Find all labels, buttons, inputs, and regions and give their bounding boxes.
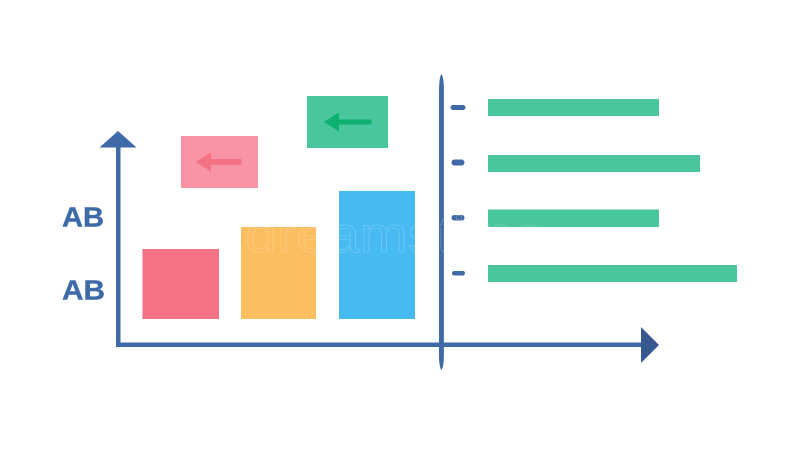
y axis arrow [100,131,136,347]
label: lower AB: AB [62,274,105,306]
callout: pink with arrow [181,136,258,188]
vertical divider [439,74,444,370]
bullet ticks [450,105,466,276]
watermark: dreamstime [245,207,545,263]
callout: green with arrow [307,96,388,148]
bar: red [142,249,219,319]
bar: blue [339,191,415,319]
bar: orange [241,227,316,319]
x axis arrow [116,327,659,363]
label: upper AB: AB [62,202,104,232]
horizontal bars [488,99,737,282]
